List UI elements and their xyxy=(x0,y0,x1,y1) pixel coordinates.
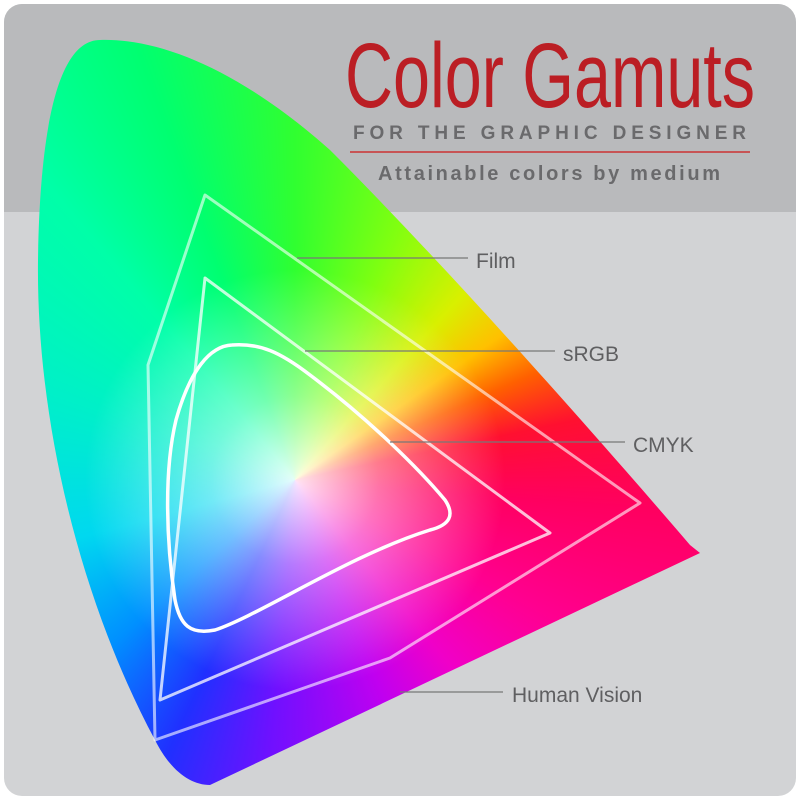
subtitle: FOR THE GRAPHIC DESIGNER xyxy=(353,123,746,144)
tagline: Attainable colors by medium xyxy=(378,163,720,185)
gamut: sRGB xyxy=(160,278,550,700)
divider xyxy=(350,151,750,153)
label: Human Vision: Human Vision xyxy=(512,684,642,707)
label: Film: Film xyxy=(476,250,516,273)
chromaticity diagram: human vision xyxy=(38,40,700,785)
gamut: Film xyxy=(148,195,640,740)
label: sRGB: sRGB xyxy=(563,343,619,366)
gamut: CMYK xyxy=(168,345,450,631)
label: CMYK: CMYK xyxy=(633,434,694,457)
